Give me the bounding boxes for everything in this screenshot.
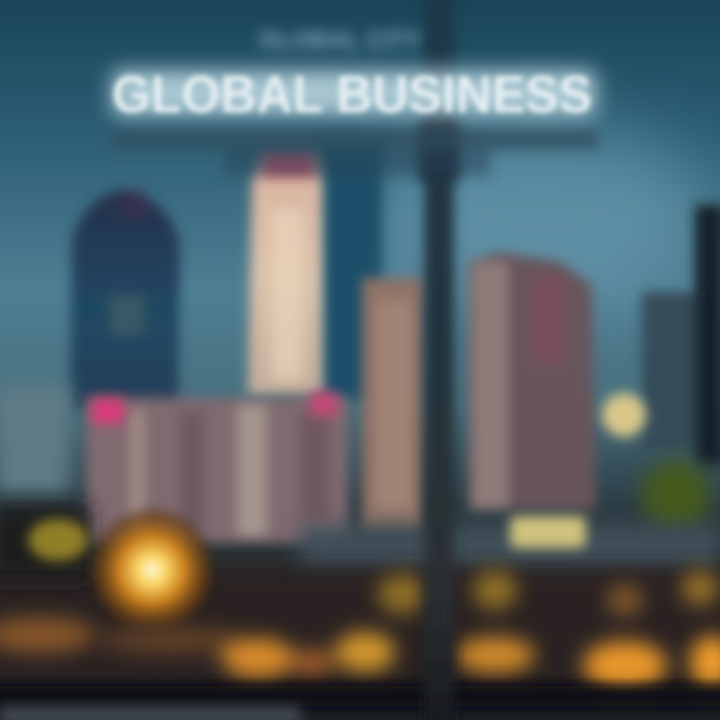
pink podium accents: [92, 392, 338, 424]
foreground lamp post: [418, 0, 460, 720]
blurred title band: [112, 70, 596, 116]
green tree: [642, 460, 710, 532]
dark foreground base: [0, 568, 720, 686]
middle tan building: [362, 278, 424, 533]
street lights row: [0, 570, 720, 689]
right mauve building: [468, 252, 596, 510]
hazy glow, right of towers: [602, 393, 646, 437]
sky glow: [370, 125, 710, 305]
sign underside shadow: [112, 128, 598, 176]
right background buildings: [642, 205, 720, 465]
blue tower behind: [322, 140, 382, 400]
pale road at bottom left: [0, 706, 300, 720]
yellow sign right: [510, 516, 586, 548]
left low building: [0, 385, 70, 495]
yellow sign left: [28, 519, 88, 561]
left dark shrubs: [0, 505, 90, 580]
main street lamp glow: [86, 504, 218, 636]
central cream tower: [248, 152, 322, 395]
mid-ground shaded strip: [300, 525, 720, 571]
left dark-blue building: [70, 190, 180, 410]
dark ground strip: [0, 686, 720, 706]
blurred small heading: GLOBAL CITY: [259, 27, 421, 54]
lower podium building: [86, 398, 348, 543]
blurred title: GLOBAL BUSINESS: [112, 66, 592, 124]
